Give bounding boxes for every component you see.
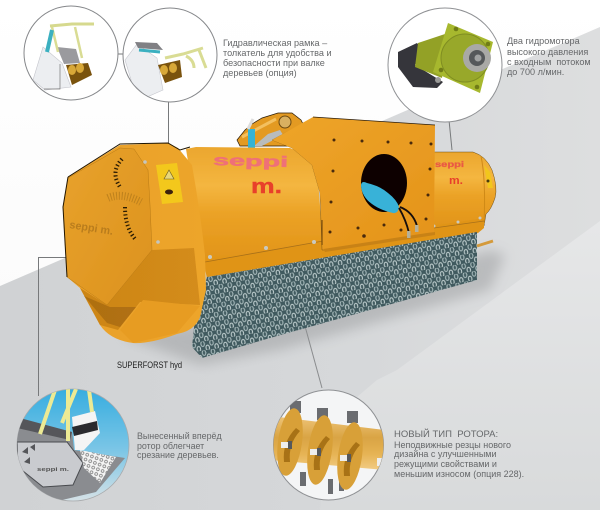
text: hydraulic motors: Два гидромотора (507, 36, 581, 46)
pin at right end (477, 241, 493, 246)
housing bolts (328, 138, 432, 238)
text: forward rotor: Вынесенный вперёд (137, 431, 222, 441)
seppi logo: seppi (213, 152, 288, 171)
right m. logo: m. (449, 175, 463, 187)
inset: hydraulic motor (388, 8, 502, 122)
hydraulic arm on top (237, 113, 305, 148)
machine ground shadow (120, 250, 505, 365)
inset: forward rotor (8, 388, 129, 501)
model caption: SUPERFORST hyd (117, 360, 182, 370)
end plate face (63, 148, 152, 305)
left end cap (63, 143, 206, 343)
right seppi logo: seppi (435, 160, 464, 169)
round opening (361, 154, 407, 212)
under skid (80, 248, 200, 343)
text: new rotor type (394, 428, 524, 479)
text: forward rotor: срезание деревьев. (137, 450, 219, 460)
text: hydraulic motors: с входным потоком (507, 57, 591, 67)
machine: seppi m. SUPERFORST mulcher (63, 113, 496, 358)
warning label (156, 163, 183, 204)
front lip (204, 218, 484, 279)
text: forward rotor (137, 431, 222, 460)
face lettering: seppi m. (69, 219, 114, 238)
text: hydraulic motors: высокого давления (507, 47, 588, 57)
text: hydraulic frame (223, 38, 332, 78)
text: forward rotor: ротор облегчает (137, 441, 204, 451)
text: new rotor type: меньшим износом (опция 228). (394, 469, 524, 479)
text: hydraulic frame: безопасности при валке (223, 58, 325, 68)
inset: rotor detail (270, 390, 385, 500)
inset: frame lowered (123, 8, 217, 102)
main cylinder (186, 147, 323, 268)
text: new rotor type: дизайна с улучшенными (394, 449, 497, 459)
blue hose (361, 182, 399, 213)
inset: frame raised (24, 6, 118, 100)
text: hydraulic motors: до 700 л/мин. (507, 67, 564, 77)
centre housing (272, 117, 435, 252)
bolts on end cap (143, 160, 160, 244)
text: hydraulic frame: толкатель для удобства и (223, 48, 332, 58)
seam line and bolts (205, 216, 484, 262)
text: new rotor type: Неподвижные резцы нового (394, 440, 511, 450)
text: hydraulic motors (507, 36, 591, 77)
leader lines (38, 54, 452, 396)
rotor face lettering: seppi m. (37, 467, 70, 473)
text: new rotor type: НОВЫЙ ТИП РОТОРА: (394, 428, 498, 440)
text: new rotor type: режущими свойствами и (394, 459, 497, 469)
chain curtain (192, 232, 477, 358)
right cylinder (430, 152, 496, 232)
text: hydraulic frame: Гидравлическая рамка – (223, 38, 328, 48)
black hoses (399, 207, 418, 238)
face vents (108, 159, 141, 240)
m. logo: m. (251, 176, 282, 198)
text: hydraulic frame: деревьев (опция) (223, 68, 297, 78)
